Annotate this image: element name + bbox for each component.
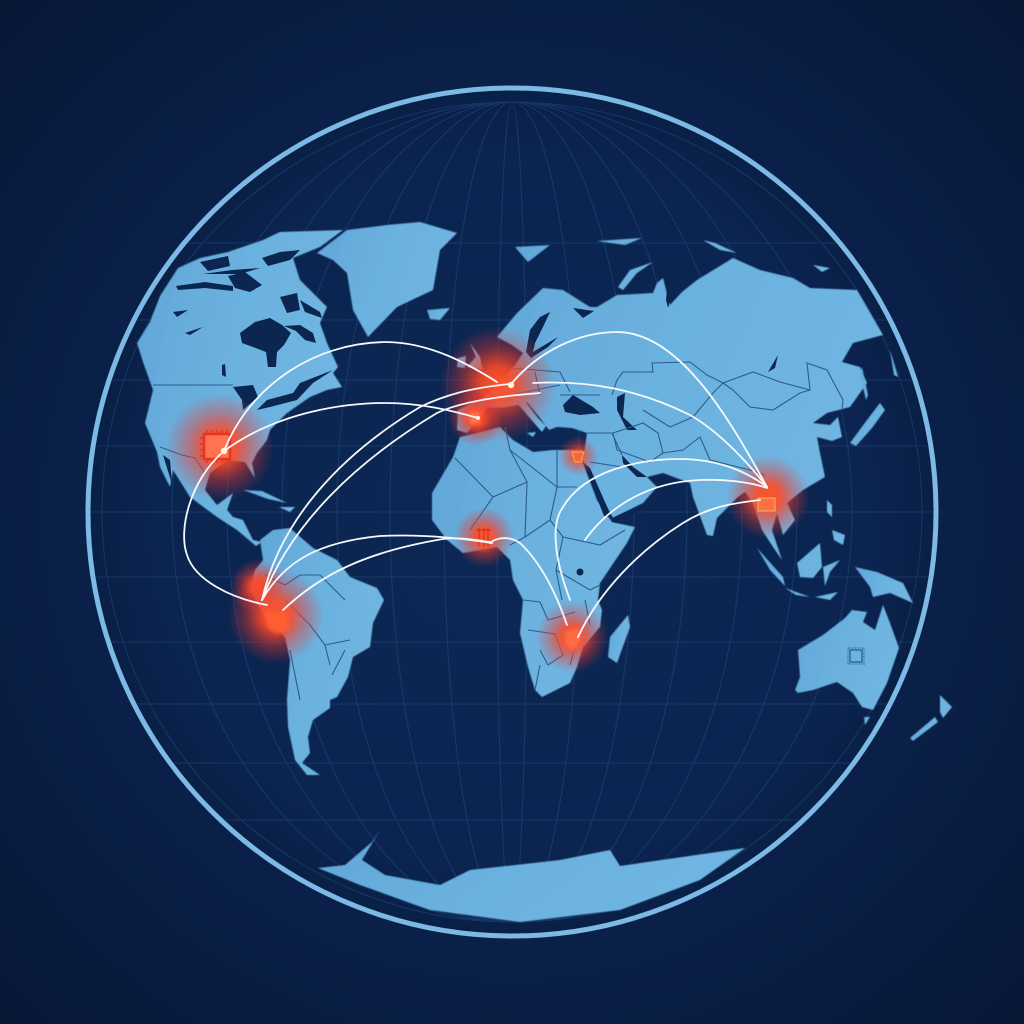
chip: Peru xyxy=(264,612,290,634)
Gulf of Aden xyxy=(612,504,643,524)
chip: Egypt xyxy=(572,452,584,462)
Baltic Sea xyxy=(526,312,558,358)
red hotspots xyxy=(166,326,810,673)
arc: US to Spain xyxy=(224,403,478,451)
Gulf of California xyxy=(163,455,172,484)
Red Sea xyxy=(583,462,612,518)
New Guinea xyxy=(855,567,913,603)
chip: West Africa xyxy=(476,528,491,546)
arc: Peru to Europe north xyxy=(262,384,510,600)
Hudson Bay xyxy=(240,318,291,367)
Persian Gulf xyxy=(622,455,647,477)
arc: US to Peru xyxy=(184,451,267,605)
arc: Peru to West Africa south xyxy=(283,538,490,610)
Caribbean islands xyxy=(243,490,295,512)
chip: Australia xyxy=(848,648,864,664)
hotspot: Egypt xyxy=(558,436,598,476)
Ungava and Foxe Basin xyxy=(284,325,316,343)
globe disc xyxy=(89,89,935,935)
inland seas and lakes xyxy=(163,280,778,576)
hotspot: Peru xyxy=(228,568,324,664)
glowing node dots xyxy=(221,382,514,454)
chip icons xyxy=(200,412,864,664)
chip: Southeast Asia xyxy=(758,498,775,511)
arc: Europe to Southeast Asia middle xyxy=(533,382,767,487)
Southeast Asian islands xyxy=(757,500,845,600)
United Kingdom and Ireland xyxy=(457,343,483,370)
chip: Spain xyxy=(470,412,480,424)
arc: Europe to Southeast Asia north xyxy=(512,332,767,487)
New Zealand xyxy=(910,695,952,741)
hotspot: Spain xyxy=(448,390,504,446)
hotspot: Southeast Asia xyxy=(726,455,810,539)
Lake Victoria xyxy=(576,568,584,576)
node: United States xyxy=(221,448,227,454)
White Sea xyxy=(573,308,594,318)
hotspot: Colombia xyxy=(230,559,286,615)
Caspian Sea xyxy=(617,393,637,430)
node: Europe xyxy=(508,382,514,388)
arc: Southern Africa to Southeast Asia south xyxy=(578,500,760,637)
outer globe ring xyxy=(88,88,936,936)
Antarctica xyxy=(318,830,745,922)
Australia xyxy=(795,605,899,710)
arc: West Africa to Southern Africa xyxy=(490,538,567,625)
arc: US to Europe xyxy=(224,342,497,451)
hotspot: Southern Africa xyxy=(536,601,608,673)
country borders xyxy=(153,362,843,700)
continent: South America xyxy=(250,528,384,775)
continent: North America with Arctic archipelago xyxy=(137,230,343,546)
Greenland xyxy=(317,222,457,337)
arc: Peru to Europe south xyxy=(262,393,540,600)
node: Spain xyxy=(476,416,480,420)
Madagascar xyxy=(608,615,630,663)
hotspot: United States xyxy=(166,393,274,501)
chip: Southern Africa xyxy=(565,628,581,650)
arc: East Africa to Southeast Asia xyxy=(585,480,767,540)
Arctic Russian islands xyxy=(515,238,830,290)
Tasmania xyxy=(864,717,870,725)
Japan and Sakhalin xyxy=(850,350,898,446)
continent: Africa xyxy=(432,427,635,697)
Great Lakes and St Lawrence xyxy=(233,370,333,410)
continent: Eurasia xyxy=(457,258,883,560)
graticule grid xyxy=(90,102,934,922)
hotspot: Western Europe xyxy=(440,326,556,442)
Ob Gulf xyxy=(666,280,673,308)
arc: Southern Africa to Southeast Asia north xyxy=(556,459,767,600)
Lake Baikal xyxy=(768,355,778,372)
Arctic channels xyxy=(176,250,322,318)
Italy and Sicily xyxy=(516,400,546,437)
world map landmasses xyxy=(137,222,952,922)
Iceland xyxy=(427,308,450,320)
arc: Peru to West Africa north xyxy=(262,535,492,600)
hotspot: West Africa xyxy=(454,507,514,567)
connection arcs xyxy=(184,332,767,637)
chip: United States xyxy=(200,430,230,463)
Canadian lakes xyxy=(173,310,226,377)
Black Sea xyxy=(563,395,600,415)
